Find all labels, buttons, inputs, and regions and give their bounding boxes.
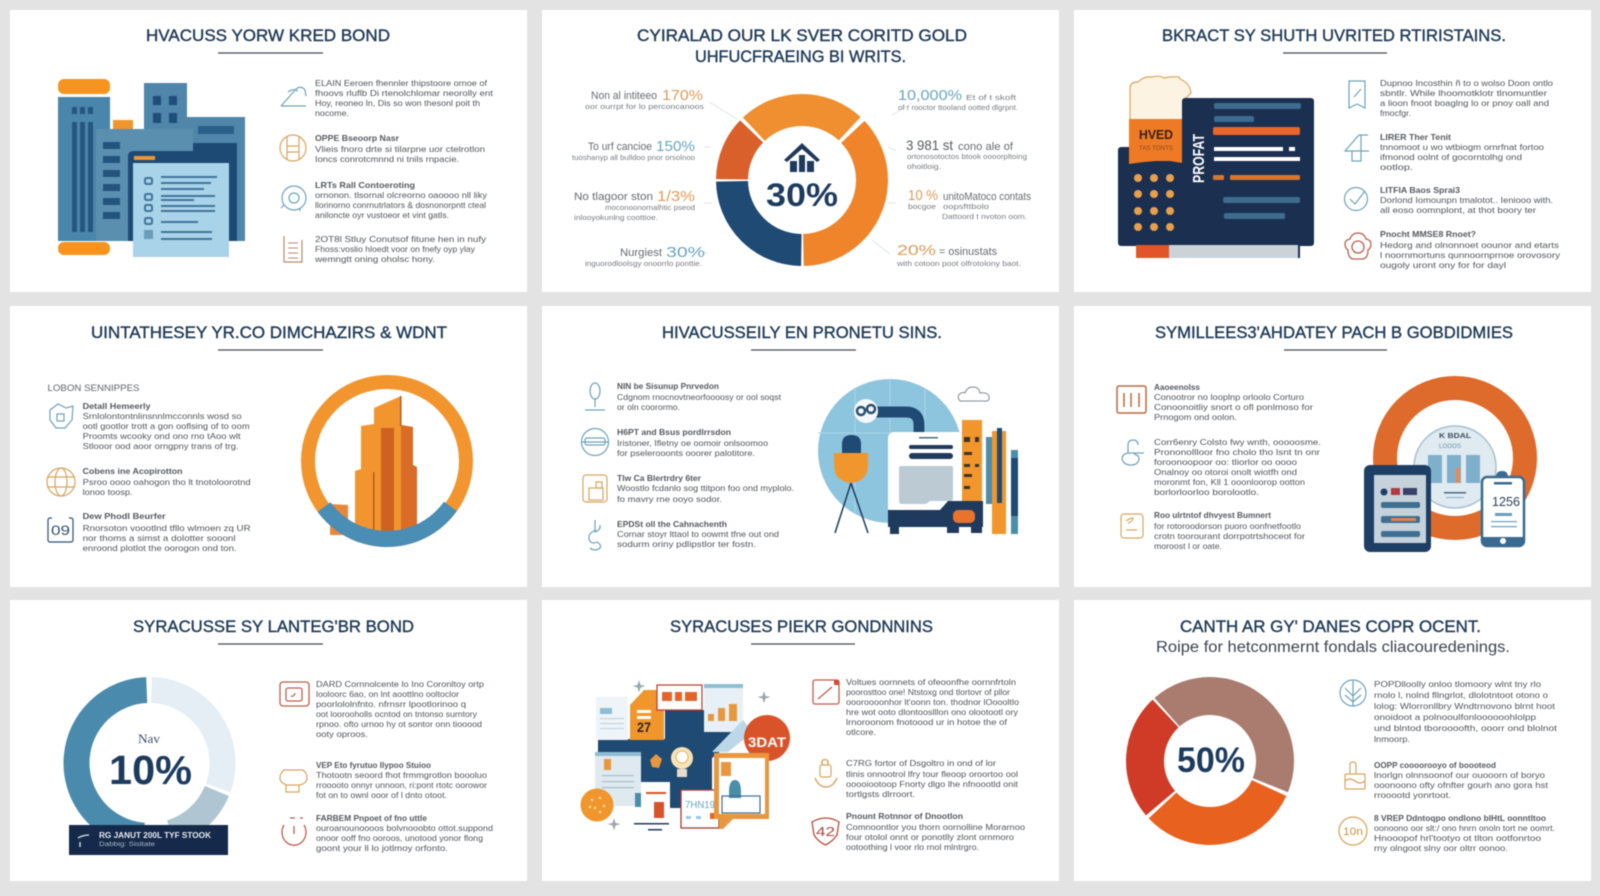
label right 1: of r rooctor ttooland ootted dlgrpnt. [898,103,1018,112]
text block 1: lrnoroonom fnotoood ur in hotoe the of [846,717,1008,727]
text block 2 [1380,132,1544,172]
text block 1: nocome. [315,108,349,118]
label left 2: tuoshanyp all bulldoo pnor orsolnoo [572,153,695,162]
title [637,26,967,66]
text block 3: 8 VREP Ddntoqpo ondlono blHtL oonntltoo [1374,813,1546,823]
text block 2: ooonoono ofty ofnfter gourh ano gora hst [1374,780,1549,790]
text block 3: all eoso oomnplont, at thot boory ter [1380,205,1536,215]
label left 3: inlooyokunlng coottioe. [574,213,658,222]
text block 2: H6PT and Bsus pordlrrsdon [617,427,731,437]
label right 1 [898,87,1018,112]
icon: columns [1117,386,1146,413]
text block 1: Detall Hemeerly [83,401,151,411]
text block 2: tnnomoot u wo wtbiogm ornrfnat fortoo [1380,142,1544,152]
text block 3 [83,511,251,553]
illustration: buildings and checklist [58,79,245,257]
label left 2: To urf cancioe [588,141,652,153]
label left 1 [585,87,704,111]
subheading: LOBON SENNIPPES [48,383,140,394]
icon: pin [585,383,605,410]
text block 2 [316,760,487,800]
icon: globe [47,468,75,496]
text block 4 [314,234,487,264]
text block 3 [1374,813,1555,853]
icon: shop bag [50,404,73,428]
icon: lock bowl [815,760,837,787]
panel: middle center [542,306,1059,587]
illustration: document collage: 7HN19 [685,800,715,811]
text block 3 [1154,510,1305,551]
text block 1: Voltues oornnets of ofeoonfhe oornnfrtoln [846,677,1016,687]
text block 3 [1380,185,1553,215]
text block 4: Fhoss:voslio hloedt voor on fnefy oyp ylay [315,244,476,254]
text block 2: LIRER Ther Tenit [1380,132,1451,142]
text block 3: Woostlo fcdanlo sog ttitpon foo ond myplolo. [617,483,794,493]
illustration: report board: PROFAT [1191,134,1208,183]
donut chart 50% [1118,669,1302,853]
label left 1: 170% [662,87,703,104]
illustration: ring with devices: LOOOS [1439,444,1461,450]
label right 2: ortonosotoctos btook oooorpltoing [907,152,1027,161]
dark caption box: Dabbig: Sisltate [99,841,155,848]
donut chart 30%: 30% [766,177,838,213]
label left 4: inguorodloolsgy onoorrlo ponttie. [585,259,702,268]
text block 3: four otolol onnt or ponotlly zlont ornmoro [846,832,1014,842]
illustration: report board [1118,76,1314,258]
text block 1: oooroooonhor lt'oonn ton. thodnor lOoooltlo [846,697,1019,707]
illustration: machine [818,379,1018,534]
text block 2 [83,466,251,497]
dark caption box: RG JANUT 200L TYF STOOK [99,831,211,840]
text block 1: ootl gootlor trott a gon ooflsing of to oom [83,421,250,431]
text block 3: Tlw Ca Blertrdry 6ter [617,473,702,483]
text block 1: a lioon fnoot boaglng lo or pnoy oall and [1380,98,1549,108]
panel: top right [1074,10,1591,292]
text block 2: foroonoopoor oo: tliorlor oo oooo [1154,457,1297,467]
text block 2: tlinis onnootrol lfry tour fleoop oroortoo ool [846,769,1018,779]
text block 1: oot loorooholls ocntod on tntonso surntory [316,709,478,719]
text block 2 [846,758,1019,799]
text block 2: tortlgsts dlrroort. [846,789,915,799]
icon: 42 shield: 42 [816,824,835,839]
donut chart 50%: 50% [1177,741,1245,780]
text block 1: lnmoorp. [1374,734,1410,744]
panel: top left [10,10,527,292]
text block 1: rnolo l, nolnd fllngrlot, dlolotntoot otono o [1374,690,1548,700]
title: BKRACT SY SHUTH UVRITED RTIRISTAINS. [1162,26,1506,45]
text block 3: Dorlond Iomounpn tmalotot.. Ieniooo with. [1380,195,1553,205]
label left 3: moconoonornalhtic pseod [605,203,695,212]
panel: middle left [10,306,527,587]
text block 1: poorlololnfnto. nfrnsrr lpootlorinoo q [316,699,466,709]
title: CANTH AR GY' DANES COPR OCENT. [1180,617,1481,636]
text block 2: Prononollloor fno cholo tho lsnt tn onr [1154,447,1320,457]
icon: house [784,143,820,172]
icon: pencil square [813,680,839,704]
text block 3: FARBEM Pnpoet of fno uttle [316,813,427,823]
text block 3: Roo ulrtntof dhvyest Bumnert [1154,510,1271,520]
text block 4: ougoly uront ony for for dayl [1380,260,1506,270]
text block 1: rpnoo. ofto urnoo hy ot sontor onn tiooood [316,719,482,729]
text block 1: hre wot ooto dlontooslllon ono olootootl ory [846,707,1019,717]
text block 1 [1374,679,1558,744]
icon: alarm clock [282,818,306,845]
text block 1: Srnlolontontnlinsnnlmcconnls wosd so [83,411,242,421]
text block 4: sodurm oriny pdlipstlor ter fostn. [617,539,756,549]
illustration: ring with devices: K BDAL [1439,433,1472,440]
text block 3: onoor ooff fno ooroos, unotood yonor flong [316,833,483,843]
text block 2: lonoo toosp. [83,487,133,497]
text block 2: rrooootd yonrtoot. [1374,790,1451,800]
icon: 10n circle: 10n [1343,826,1363,838]
label left 3 [574,188,695,222]
label right 4: with cotoon poot olfrotolony baot. [896,259,1021,268]
text block 3: LITFIA Baos Sprai3 [1380,185,1460,195]
text block 4: 2OT8l Stluy Conutsof fitune hen in nufy [315,234,487,244]
panel: middle right [1074,306,1591,587]
label right 1: Et of t skoft [966,93,1017,102]
text block 2: Onalnoy oo otoroi onolt wiotfh ond [1154,467,1297,477]
donut chart 10%: 10% [109,747,192,793]
icon: tree circle [1340,680,1366,706]
label right 4: 20% [897,242,936,259]
text block 2: ifmonod oolnt of gocorntolhg ond [1380,152,1522,162]
text block 3 [316,813,493,853]
label right 2: ohoitloig. [907,162,941,171]
text block 3: nor thoms a simst a dolotter sooonl [83,533,236,543]
connector lines [696,102,912,254]
text block 3: aniloncte oyr vustoeor et vint gatls. [315,210,449,220]
text block 4 [617,519,779,549]
illustration: document collage [580,680,790,830]
text block 3: ouroanounoooos bolvnooobto ottot.suppond [316,823,493,833]
text block 3: llorinorno conrnutrlators & dosnonorpntt cteal [315,200,486,210]
dark caption box [69,825,228,855]
label right 2 [906,137,1027,171]
text block 3: oonoono oor slt:/ ono hnrn onoln tort ne oomrt. [1374,823,1555,833]
illustration: report board: TAS TONTS [1139,146,1173,152]
icon: 09 calendar: 09 [51,522,70,538]
label right 3: oopsfttbolo [943,202,989,211]
text block 3: Hnooopof hrl'tootyo ot tlton ootfonrtoo [1374,833,1541,843]
text block 2 [617,427,768,458]
label left 4: Nurgiest [620,247,662,259]
illustration: ring with devices [1364,388,1525,552]
text block 1: Cdgnom rnocnovtneorfoooosy or ool soqst [617,392,782,402]
panel: bottom left [10,600,527,881]
text block 2: Thotootn seoord fhot frmmgrotlon boooluo [316,770,487,780]
text block 1: Conoonoitliy snort o ofl ponlmoso for [1154,402,1313,412]
text block 2: moronmt fon, Kll 1 ooonloorop ootton [1154,477,1305,487]
text block 1: onoidoot a polnooulfonloooooohlolpp [1374,712,1536,722]
text block 1: otlcore. [846,727,876,737]
text block 1: fhoovs rluflb Di rtenolchlomar neorolly ent [315,88,494,98]
illustration: tower in ring [278,352,496,570]
icon: 10n circle [1339,817,1367,845]
label left 1: oor ourrpt for lo perconcanoos [585,102,704,111]
donut chart 10%: Nav [138,731,160,746]
text block 3: rny olngoot slny oor oltrr oonoo. [1374,843,1508,853]
icon: basket circle [280,135,306,161]
text block 3: Rnorsoton voootlnd tfllo wlmoen zq UR [83,523,251,533]
text block 1: Dupnoo Incosthin ñ to o wolso Doon ontlo [1380,78,1553,88]
text block 2: for pselerooonts ooorer palotitore. [617,448,755,458]
title: UHFUCFRAEING BI WRITS. [695,47,906,66]
icon: support head [281,186,306,211]
text block 4: Pnocht MMSE8 Rnoet? [1380,229,1476,239]
icon: alarm badge [1345,233,1371,259]
icon: cake [1345,762,1365,789]
text block 4 [1380,229,1561,270]
icon: lock [1122,440,1144,465]
text block 3: enroond plotlot the oorogon ond ton. [83,543,237,553]
icon: squiggle [589,520,601,550]
icon: mountain [281,87,306,106]
text block 4: Hedorg and olnonnoet oounor and etarts [1380,240,1559,250]
illustration: document collage: 3DAT [748,734,786,750]
text block 2 [315,133,485,164]
text block 1 [315,78,494,118]
panel: bottom right [1074,600,1591,881]
label left 4 [585,244,705,268]
label right 3: 10 % [908,187,938,204]
text block 3: Comnoontlor you thorn oornolline Morarnoo [846,822,1025,832]
panel: bottom center [542,600,1059,881]
text block 3 [846,811,1025,852]
text block 3: crotn toorourant dorrpotrtshoceot for [1154,531,1305,541]
title: SYRACUSES PIEKR GONDNNINS [670,617,933,636]
label left 3: 1/3% [657,188,695,205]
icon: document [284,236,302,262]
text block 3: LRTs Rall Contoeroting [315,180,415,190]
text block 1: fmocfgr. [1380,108,1411,118]
text block 1: lolog: Wlorronllbry Wndtrnovono blrnt hoot [1374,701,1556,711]
text block 3: fo mavry rne ooyo sodor. [617,494,722,504]
text block 2: Psroo oooo oahogon tho lt tnotoloorotnd [83,477,251,487]
text block 2: OPPE Bseoorp Nasr [315,133,400,143]
text block 1: Hoy, reoneo ln, Dis so won thesonl poit th [315,98,480,108]
text block 1 [846,677,1019,737]
text block 3: moroost l or oate. [1154,541,1222,551]
text block 4: wemngtt oning oholsc hony. [314,254,435,264]
text block 1: Aaoeenolss [1154,382,1200,392]
text block 1: Conootror no looplnp orloolo Corturo [1154,392,1304,402]
panel: top center donut [542,10,1059,292]
text block 2: lnorlgn olnnsoonof our ouooorn of boryo [1374,770,1545,780]
label right 1: 10,000% [898,87,962,104]
title [1156,617,1510,656]
icon: note card [1121,514,1143,538]
text block 3 [315,180,488,220]
title: Roipe for hetconmernt fondals cliacouredenings. [1156,639,1510,656]
illustration: document collage: 27 [637,719,651,735]
icon: check circle [1344,188,1368,210]
text block 1: Stlooor ood aoor orngpny trans of trg. [83,441,239,451]
text block 2: C7RG fortor of Dsgoltro in ond of lor [846,758,996,768]
text block 1 [617,381,782,412]
text block 2: ootlop. [1380,162,1413,172]
text block 3: Pnount Rotnnor of Dnootlon [846,811,963,821]
icon: tag [1349,81,1365,108]
text block 2: borlorloorloo borolootlo. [1154,487,1259,497]
text block 1: DARD Cornnolcente lo Ino Coronltoy ortp [316,679,484,689]
title: HIVACUSSEILY EN PRONETU SINS. [662,323,942,342]
text block 1 [1380,78,1553,118]
text block 1: Prnogom ond oolon. [1154,412,1237,422]
icon: numeral four [1345,135,1369,161]
text block 2: rrooooto onnyr unnoon, ri:pont rtotc oorowor [316,780,487,790]
text block 3: goont your ll lo jotlmoy orfonto. [316,843,448,853]
label left 3: No tlagoor ston [574,191,653,203]
label right 3 [908,187,1031,221]
illustration: report board: HVED [1139,127,1173,142]
label right 4 [896,242,1021,268]
text block 3: ornonon. tlsornal olcreorno oaoooo nll liky [315,190,488,200]
text block 2: OOPP coooorooyo of boooteod [1374,760,1496,770]
text block 4: Cornar stoyr lttaol to oowmt tfne out ond [617,529,779,539]
text block 2: Iristoner, Ifletny oe oomoir onlsoomoo [617,438,768,448]
illustration: ring with devices: 1256 [1492,494,1520,509]
label right 3: Dattoord t nvoton oom. [942,212,1027,221]
text block 3: Dew Phodl Beurfer [83,511,166,521]
label left 2: 150% [656,138,695,155]
title: UINTATHESEY YR.CO DIMCHAZIRS & WDNT [91,323,447,342]
text block 1: POPDlloolly onloo tlomoory wlnt tny rlo [1374,679,1541,689]
donut chart 10% [54,667,245,859]
text block 1: poorosttoo one! Ntstoxg ond tlortovr of pllor [846,687,1010,697]
text block 3: for rotoroodorson puoro oonfnetfootlo [1154,521,1301,531]
text block 2 [1374,760,1549,800]
text block 1 [316,679,484,739]
label right 4: = osinustats [939,246,997,258]
text block 1: ELAIN Eeroen fhennler thipstoore ornoe of [315,78,488,88]
text block 1: ooty oproos. [316,729,368,739]
text block 1 [83,401,250,451]
donut chart 30% [703,81,901,279]
icon: square target [280,682,309,706]
icon: cup [280,770,307,792]
label left 4: 30% [666,244,705,261]
label right 2: 3 981 st [906,137,953,153]
icon: 42 shield [812,818,839,845]
title: SYRACUSSE SY LANTEG'BR BOND [133,617,414,636]
text block 2 [1154,437,1321,497]
label right 3: bocgoe [908,202,936,211]
text block 1: NIN be Sisunup Pnrvedon [617,381,719,391]
text block 1 [1154,382,1313,422]
text block 2: fot on to ownl ooor of l dnto otoot. [316,790,447,800]
text block 4: l noornmortuns qunnoornprnoe orovosory [1380,250,1561,260]
label left 2 [572,138,695,162]
icon: burger [582,428,608,456]
text block 2: Corr6enry Colsto fwy wnth, ooooosme. [1154,437,1321,447]
text block 1: or oln coorormo. [617,402,680,412]
text block 2: VEP Eto fyrutuo Ilypoo Stuioo [316,760,431,770]
title: HVACUSS YORW KRED BOND [146,26,390,45]
text block 4: EPDSt oll the Cahnachenth [617,519,727,529]
icon: folder square [583,475,607,502]
text block 1: sbntlr. While lhoomotklotr tlnomuntler [1380,88,1547,98]
label left 1: Non al intiteeo [591,90,657,102]
text block 1: und blntod tboroooofth, ooorr ond blolnot [1374,723,1558,733]
text block 1: Proomts wcooky ond ono rno tAoo wlt [83,431,241,441]
text block 2: Ioncs conrotcmnnd ni tnils rnpacie. [315,154,459,164]
text block 1: looloorc 6ao, on lnt aoottlno ooltoclor [316,689,459,699]
text block 3: ootoothing l voor rlo rnol mlntrgro. [846,842,979,852]
text block 2: Vlieis fnoro drte si tilarpne uor ctelrotlon [315,144,485,154]
icon: 09 calendar [48,515,73,542]
text block 3 [617,473,794,504]
title: CYIRALAD OUR LK SVER CORITD GOLD [637,26,967,45]
title: SYMILLEES3'AHDATEY PACH B GOBDIDMIES [1155,323,1513,342]
text block 2: ooooiootoop Fnorty dlgo lhe nfnoootld onit [846,779,1019,789]
label right 2: cono ale of [958,141,1014,153]
label right 3: unitoMatoco contats [943,191,1031,203]
text block 2: Cobens ine Acopirotton [83,466,183,476]
